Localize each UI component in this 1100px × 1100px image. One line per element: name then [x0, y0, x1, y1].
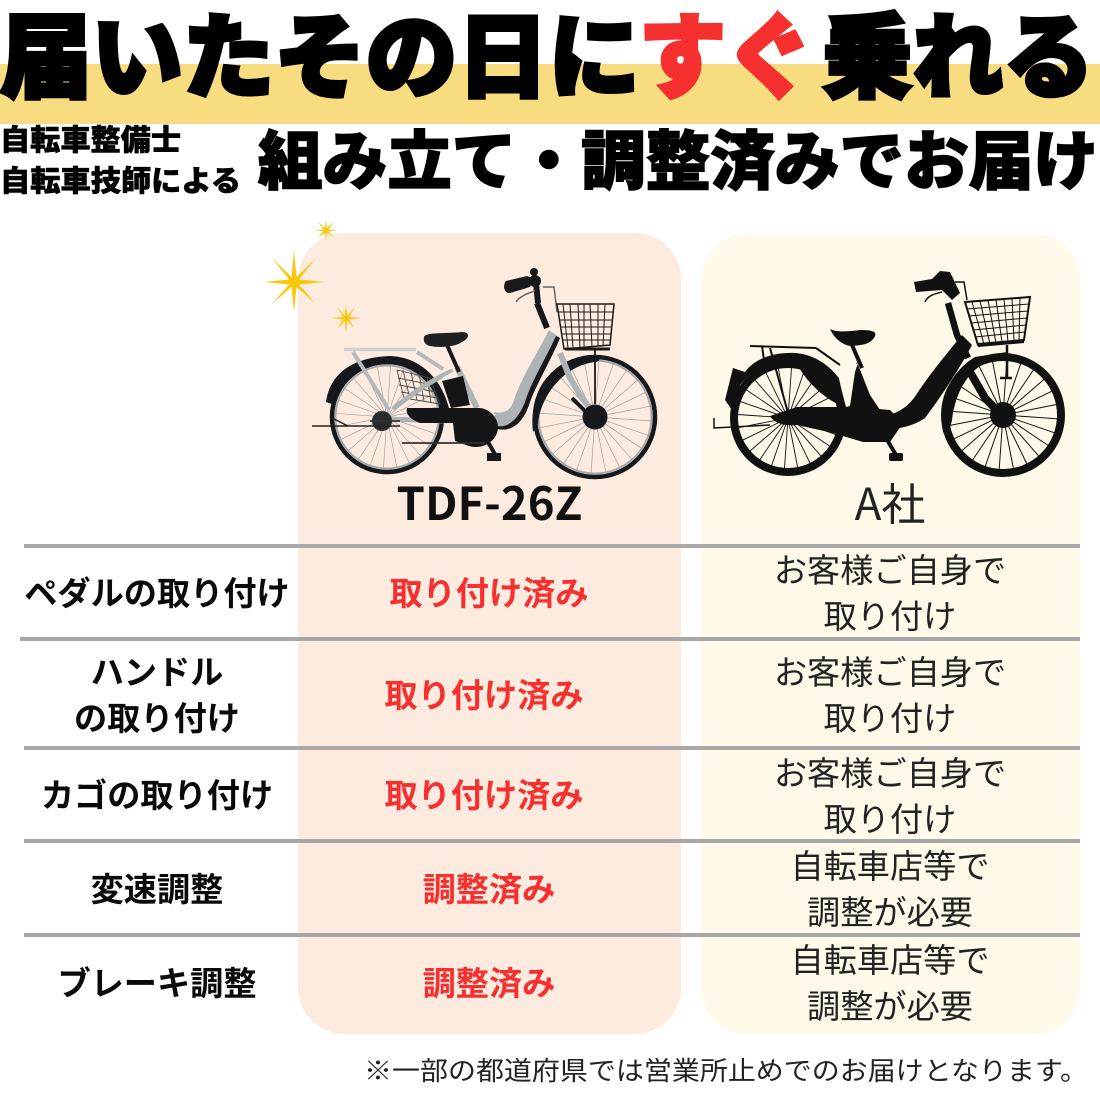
highlight band	[0, 64, 1100, 124]
kickstand	[488, 442, 496, 456]
illustration: silver electric bicycle	[312, 268, 655, 477]
rear derailleur stay	[312, 418, 400, 426]
panel: company A column	[701, 234, 1080, 1034]
row: gear adjustment	[91, 839, 990, 934]
subtitle: qualified mechanics: 自転車整備士	[0, 117, 181, 159]
subtitle: qualified mechanics: 自転車技師による	[0, 158, 241, 200]
row: gear adjustment: 変速調整	[91, 862, 223, 911]
footnote: ※一部の都道府県では営業所止めでのお届けとなります。	[364, 1051, 1088, 1088]
seat	[424, 332, 468, 347]
row: pedal installation: 取り付け済み	[389, 566, 589, 615]
row: basket installation	[41, 746, 1006, 841]
product name: TDF-26Z: TDF-26Z	[397, 468, 582, 534]
subtitle: qualified mechanics	[0, 117, 241, 200]
handlebar grip	[504, 276, 534, 293]
rear wheel	[331, 361, 443, 473]
seat tube block	[846, 362, 880, 410]
row: handlebar installation: 取り付け済み	[384, 668, 584, 717]
front wheel	[942, 354, 1064, 476]
competitor name: A社: A社	[855, 469, 925, 533]
front fender	[942, 352, 1007, 437]
row: brake adjustment: 自転車店等で	[790, 933, 990, 982]
rear wheel	[732, 362, 844, 474]
front fender	[532, 356, 600, 432]
row: pedal installation	[24, 543, 1006, 638]
basket	[557, 304, 614, 349]
row: handlebar installation: の取り付け	[74, 691, 240, 740]
illustration: black silhouette bicycle	[714, 271, 1064, 476]
row: handlebar installation: お客様ご自身で	[774, 645, 1006, 694]
battery	[442, 376, 470, 408]
chain case and motor	[407, 408, 498, 447]
seat	[830, 329, 875, 346]
handlebar grip	[914, 271, 960, 300]
row dividers	[20, 544, 1080, 937]
rear fender and panel	[725, 353, 855, 410]
rack	[344, 348, 416, 351]
row: basket installation: お客様ご自身で	[774, 746, 1006, 795]
rack	[750, 346, 840, 420]
kickstand	[886, 438, 896, 455]
rear fender	[326, 356, 449, 409]
row: handlebar installation: 取り付け	[824, 691, 956, 740]
battery outline	[838, 363, 858, 407]
row: brake adjustment	[57, 933, 990, 1028]
row: gear adjustment: 調整が必要	[807, 885, 973, 934]
row: handlebar installation	[74, 645, 1006, 740]
brake lever and cable	[516, 287, 557, 312]
rear basket mesh	[397, 370, 440, 404]
fork	[970, 372, 1003, 417]
dropout	[714, 418, 770, 428]
frame	[892, 335, 972, 429]
seat post	[447, 345, 459, 372]
row: basket installation: 取り付け済み	[384, 768, 584, 817]
subtitle: assembled and adjusted: 組み立て・調整済みでお届け	[258, 111, 1098, 203]
row: handlebar installation: ハンドル	[91, 645, 223, 694]
row: pedal installation: お客様ご自身で	[774, 543, 1006, 592]
rear stays and seat tube	[387, 371, 453, 421]
front wheel	[535, 357, 655, 477]
handlebar stem	[536, 283, 547, 328]
row: gear adjustment: 自転車店等で	[790, 839, 990, 888]
row: gear adjustment: 調整済み	[423, 862, 555, 911]
row: basket installation: カゴの取り付け	[41, 768, 273, 817]
row: brake adjustment: 調整済み	[423, 956, 555, 1005]
fork	[560, 353, 597, 417]
title	[0, 0, 1094, 117]
chain case and motor	[770, 407, 903, 442]
row: brake adjustment: ブレーキ調整	[57, 956, 257, 1005]
row: pedal installation: 取り付け	[824, 589, 956, 638]
row: pedal installation: ペダルの取り付け	[24, 566, 290, 615]
basket	[965, 297, 1030, 345]
handlebar stem	[948, 303, 968, 358]
panel: TDF-26Z column	[298, 233, 681, 1034]
front hub	[582, 404, 608, 430]
icon: sparkles	[264, 219, 361, 333]
row: brake adjustment: 調整が必要	[807, 979, 973, 1028]
row: basket installation: 取り付け	[824, 792, 956, 841]
silver frame	[494, 330, 560, 428]
